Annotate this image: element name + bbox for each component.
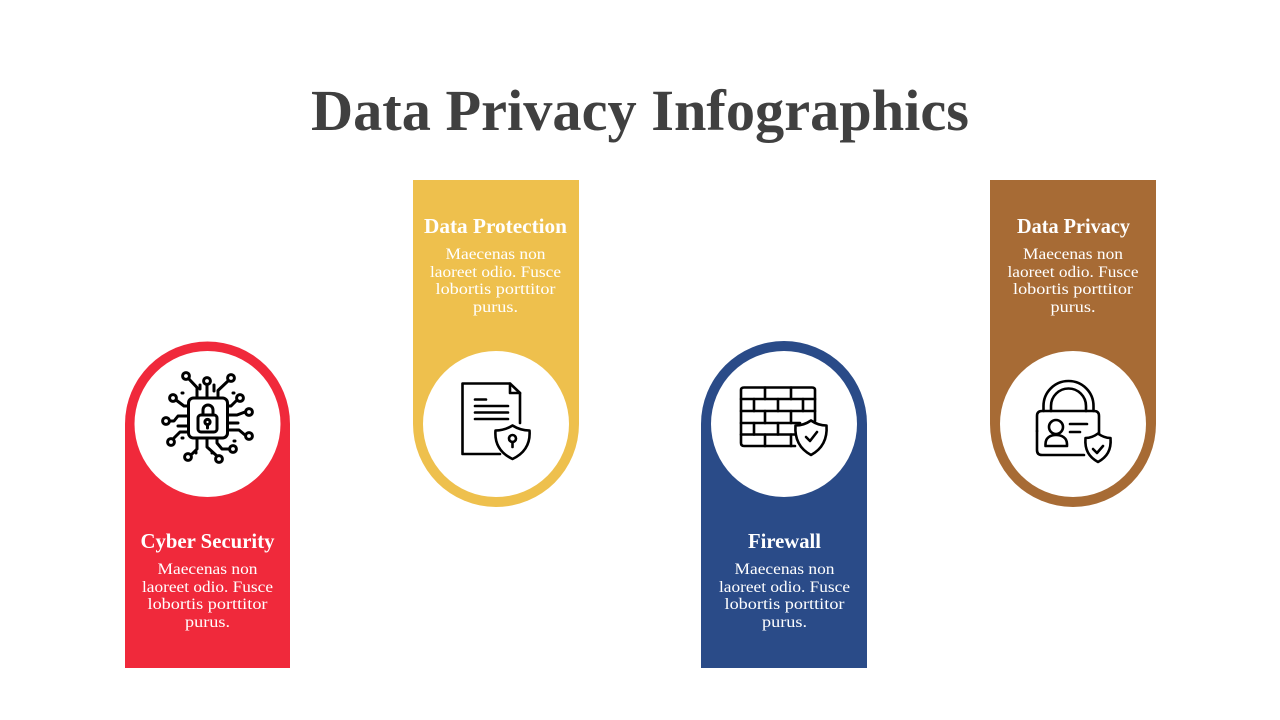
panel: data privacy [990,180,1156,507]
white icon circle [134,351,280,497]
body text: purus. [762,614,807,631]
white icon circle [711,351,857,497]
heading: Data Privacy [1017,214,1130,238]
body text: lobortis porttitor [148,596,268,613]
body text: Maecenas non [1023,246,1123,263]
icon: padlock with id and shield [1037,381,1111,462]
heading: Cyber Security [140,529,275,553]
red capsule shape [125,342,290,668]
body text: lobortis porttitor [1013,281,1134,298]
body text: purus. [185,614,230,631]
body text: purus. [1050,299,1096,316]
body text: lobortis porttitor [724,596,845,613]
heading: Data Protection [424,214,567,238]
body text [142,561,273,631]
panel: firewall [701,341,867,668]
body text: lobortis porttitor [436,281,556,298]
blue capsule shape [701,341,867,668]
icon: circuit chip with padlock [163,373,252,462]
title: Data Privacy Infographics [311,78,969,143]
body text: Maecenas non [158,561,258,578]
body text [719,561,850,631]
body text: laoreet odio. Fusce [142,579,273,596]
icon: brick wall with shield [741,388,827,455]
heading: Firewall [748,529,821,553]
body text [430,246,561,316]
body text: Maecenas non [446,246,546,263]
panel: data protection [413,180,579,507]
body text: laoreet odio. Fusce [1008,264,1138,281]
body text: Maecenas non [734,561,834,578]
body text: laoreet odio. Fusce [719,579,850,596]
body text [1008,246,1138,316]
brown capsule shape [990,180,1156,507]
yellow capsule shape [413,180,579,507]
panel: cyber security [125,342,290,668]
white icon circle [423,351,569,497]
body text: purus. [473,299,518,316]
body text: laoreet odio. Fusce [430,264,561,281]
icon: document with shield [462,384,530,459]
white icon circle [1000,351,1146,497]
